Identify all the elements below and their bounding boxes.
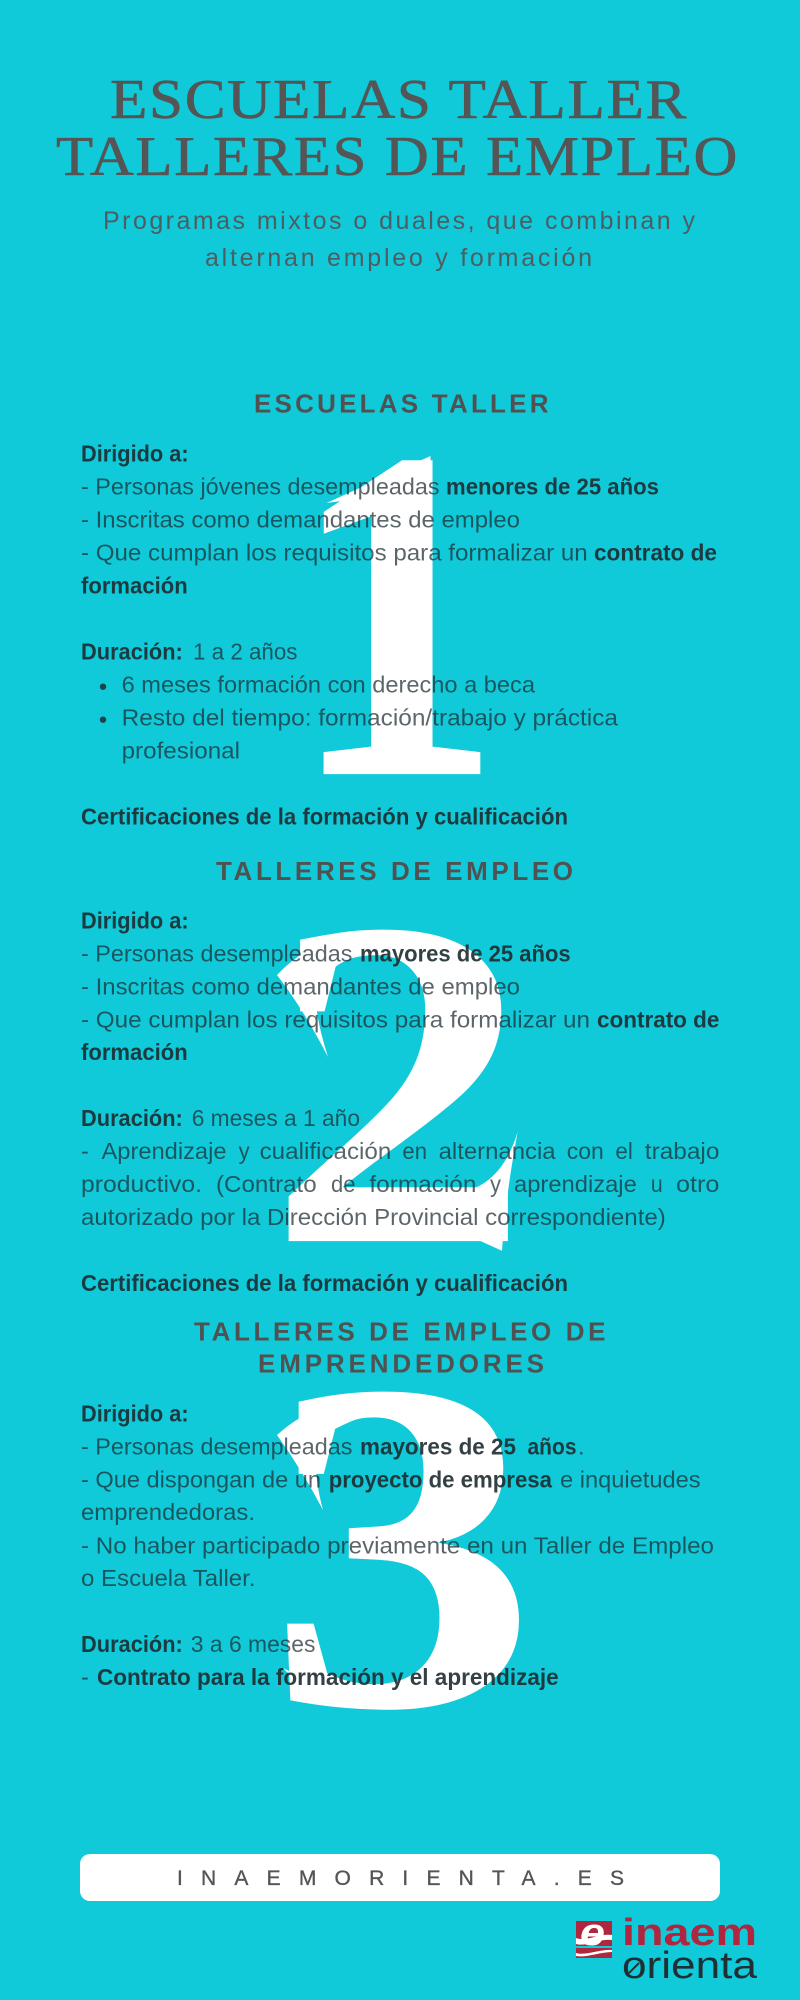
- text block: duración: trabajo: [645, 1138, 719, 1164]
- text block: dirigido a: [81, 1400, 714, 1591]
- text block: dirigido a: Dirigido a:: [81, 907, 189, 933]
- title: TALLERES DE EMPLEO: [56, 126, 739, 188]
- text block: duración: Resto del tiempo: formación/trabajo y práctica: [122, 705, 619, 731]
- text block: dirigido a: - Personas desempleadas: [81, 1433, 352, 1459]
- text block: dirigido a: - Inscritas como demandantes de empleo: [81, 507, 520, 533]
- text block: dirigido a: - Que dispongan de un: [81, 1466, 321, 1492]
- text block: duración: Duración:: [81, 639, 183, 665]
- heading: talleres de empleo de emprendedores: EMPRENDEDORES: [258, 1348, 544, 1378]
- text block: dirigido a: Dirigido a:: [81, 1400, 189, 1426]
- icon: compass needle: [629, 1963, 639, 1973]
- text block: duración: autorizado por la Dirección Provincial correspondiente): [81, 1204, 666, 1230]
- text block: duración: Contrato para la formación y el aprendizaje: [97, 1664, 559, 1690]
- subtitle: Programas mixtos o duales, que combinan y: [103, 207, 696, 235]
- panel: talleres de empleo de emprendedores: [81, 1317, 714, 1690]
- text block: dirigido a: mayores de 25 años: [360, 940, 571, 966]
- text block: duración: y: [239, 1138, 250, 1164]
- text block: duración: el: [615, 1138, 633, 1164]
- heading: talleres de empleo de emprendedores: TALLERES DE EMPLEO DE: [194, 1317, 606, 1347]
- text block: dirigido a: años: [528, 1433, 576, 1459]
- text block: dirigido a: - No haber participado previamente en un Taller de Empleo: [81, 1532, 714, 1558]
- text block: duración: Duración:: [81, 1631, 183, 1657]
- text block: dirigido a: [81, 441, 717, 598]
- text block: duración: otro: [676, 1171, 719, 1197]
- text block: duración: profesional: [122, 738, 240, 764]
- text block: dirigido a: e inquietudes: [560, 1466, 701, 1492]
- text block: duración: productivo.: [81, 1171, 202, 1197]
- text block: dirigido a: - Que cumplan los requisitos para formalizar un: [81, 540, 588, 566]
- text block: dirigido a: .: [578, 1433, 585, 1459]
- text block: dirigido a: Dirigido a:: [81, 441, 189, 467]
- subtitle: alternan empleo y formación: [205, 244, 592, 272]
- text block: duración: [81, 639, 619, 764]
- text block: dirigido a: - Inscritas como demandantes de empleo: [81, 973, 520, 999]
- text block: dirigido a: formación: [81, 1039, 188, 1065]
- text block: dirigido a: - Que cumplan los requisitos para formalizar un: [81, 1006, 590, 1032]
- text block: dirigido a: mayores de 25: [360, 1433, 516, 1459]
- website pill: INAEMORIENTA.ES: [177, 1867, 624, 1890]
- text block: duración: en: [402, 1138, 427, 1164]
- text block: duración: u: [651, 1171, 663, 1197]
- text block: duración: [81, 1631, 559, 1690]
- subtitle: [103, 207, 696, 272]
- text block: duración: 3 a 6 meses: [191, 1631, 315, 1657]
- text block: dirigido a: emprendedoras.: [81, 1499, 255, 1525]
- text block: duración: formación: [369, 1171, 476, 1197]
- text block: duración: aprendizaje: [514, 1171, 637, 1197]
- logo: inaem orienta: [576, 1912, 758, 1987]
- text block: duración: -: [81, 1664, 89, 1690]
- text block: duración: [81, 1105, 719, 1230]
- text block: dirigido a: formación: [81, 572, 188, 598]
- text block: dirigido a: proyecto de empresa: [329, 1466, 553, 1492]
- text block: duración: cualificación: [260, 1138, 391, 1164]
- text block: duración: Duración:: [81, 1105, 183, 1131]
- text block: duración: (Contrato: [216, 1171, 317, 1197]
- icon: red e square: e: [580, 1912, 605, 1954]
- text block: duración: y: [490, 1171, 501, 1197]
- heading: talleres de empleo de emprendedores: [194, 1317, 606, 1378]
- text block: dirigido a: - Personas desempleadas: [81, 940, 352, 966]
- big numeral 2: 2: [268, 825, 529, 1342]
- text block: dirigido a: o Escuela Taller.: [81, 1565, 256, 1591]
- big numeral 3: 3: [268, 1285, 536, 1806]
- website pill: [80, 1854, 720, 1901]
- text block: dirigido a: contrato de: [594, 540, 717, 566]
- text block: dirigido a: - Personas jóvenes desempleadas: [81, 474, 440, 500]
- heading: escuelas taller: ESCUELAS TALLER: [254, 389, 549, 419]
- text block: duración: de: [331, 1171, 356, 1197]
- panel: talleres de empleo: [81, 856, 719, 1296]
- title: [56, 69, 739, 188]
- text block: certificaciones: Certificaciones de la formación y cualificación: [81, 1270, 568, 1296]
- big numeral 1: 1: [291, 353, 501, 875]
- text block: duración: 6 meses formación con derecho a beca: [122, 672, 536, 698]
- text block: duración: Aprendizaje: [102, 1138, 226, 1164]
- text block: duración: con: [567, 1138, 604, 1164]
- text block: duración: 6 meses a 1 año: [192, 1105, 360, 1131]
- icon: red e square: [576, 1912, 612, 1958]
- text block: duración: -: [81, 1138, 89, 1164]
- logo word: orienta: orienta: [622, 1945, 758, 1987]
- logo word: inaem: inaem: [622, 1912, 757, 1954]
- text block: dirigido a: contrato de: [597, 1006, 719, 1032]
- text block: duración: 1 a 2 años: [193, 639, 298, 665]
- heading: talleres de empleo: TALLERES DE EMPLEO: [216, 856, 573, 886]
- title: ESCUELAS TALLER: [110, 69, 688, 131]
- text block: dirigido a: menores de 25 años: [446, 474, 659, 500]
- panel: escuelas taller: [81, 389, 717, 830]
- text block: duración: alternancia: [439, 1138, 557, 1164]
- text block: certificaciones: Certificaciones de la formación y cualificación: [81, 804, 568, 830]
- text block: dirigido a: [81, 907, 719, 1065]
